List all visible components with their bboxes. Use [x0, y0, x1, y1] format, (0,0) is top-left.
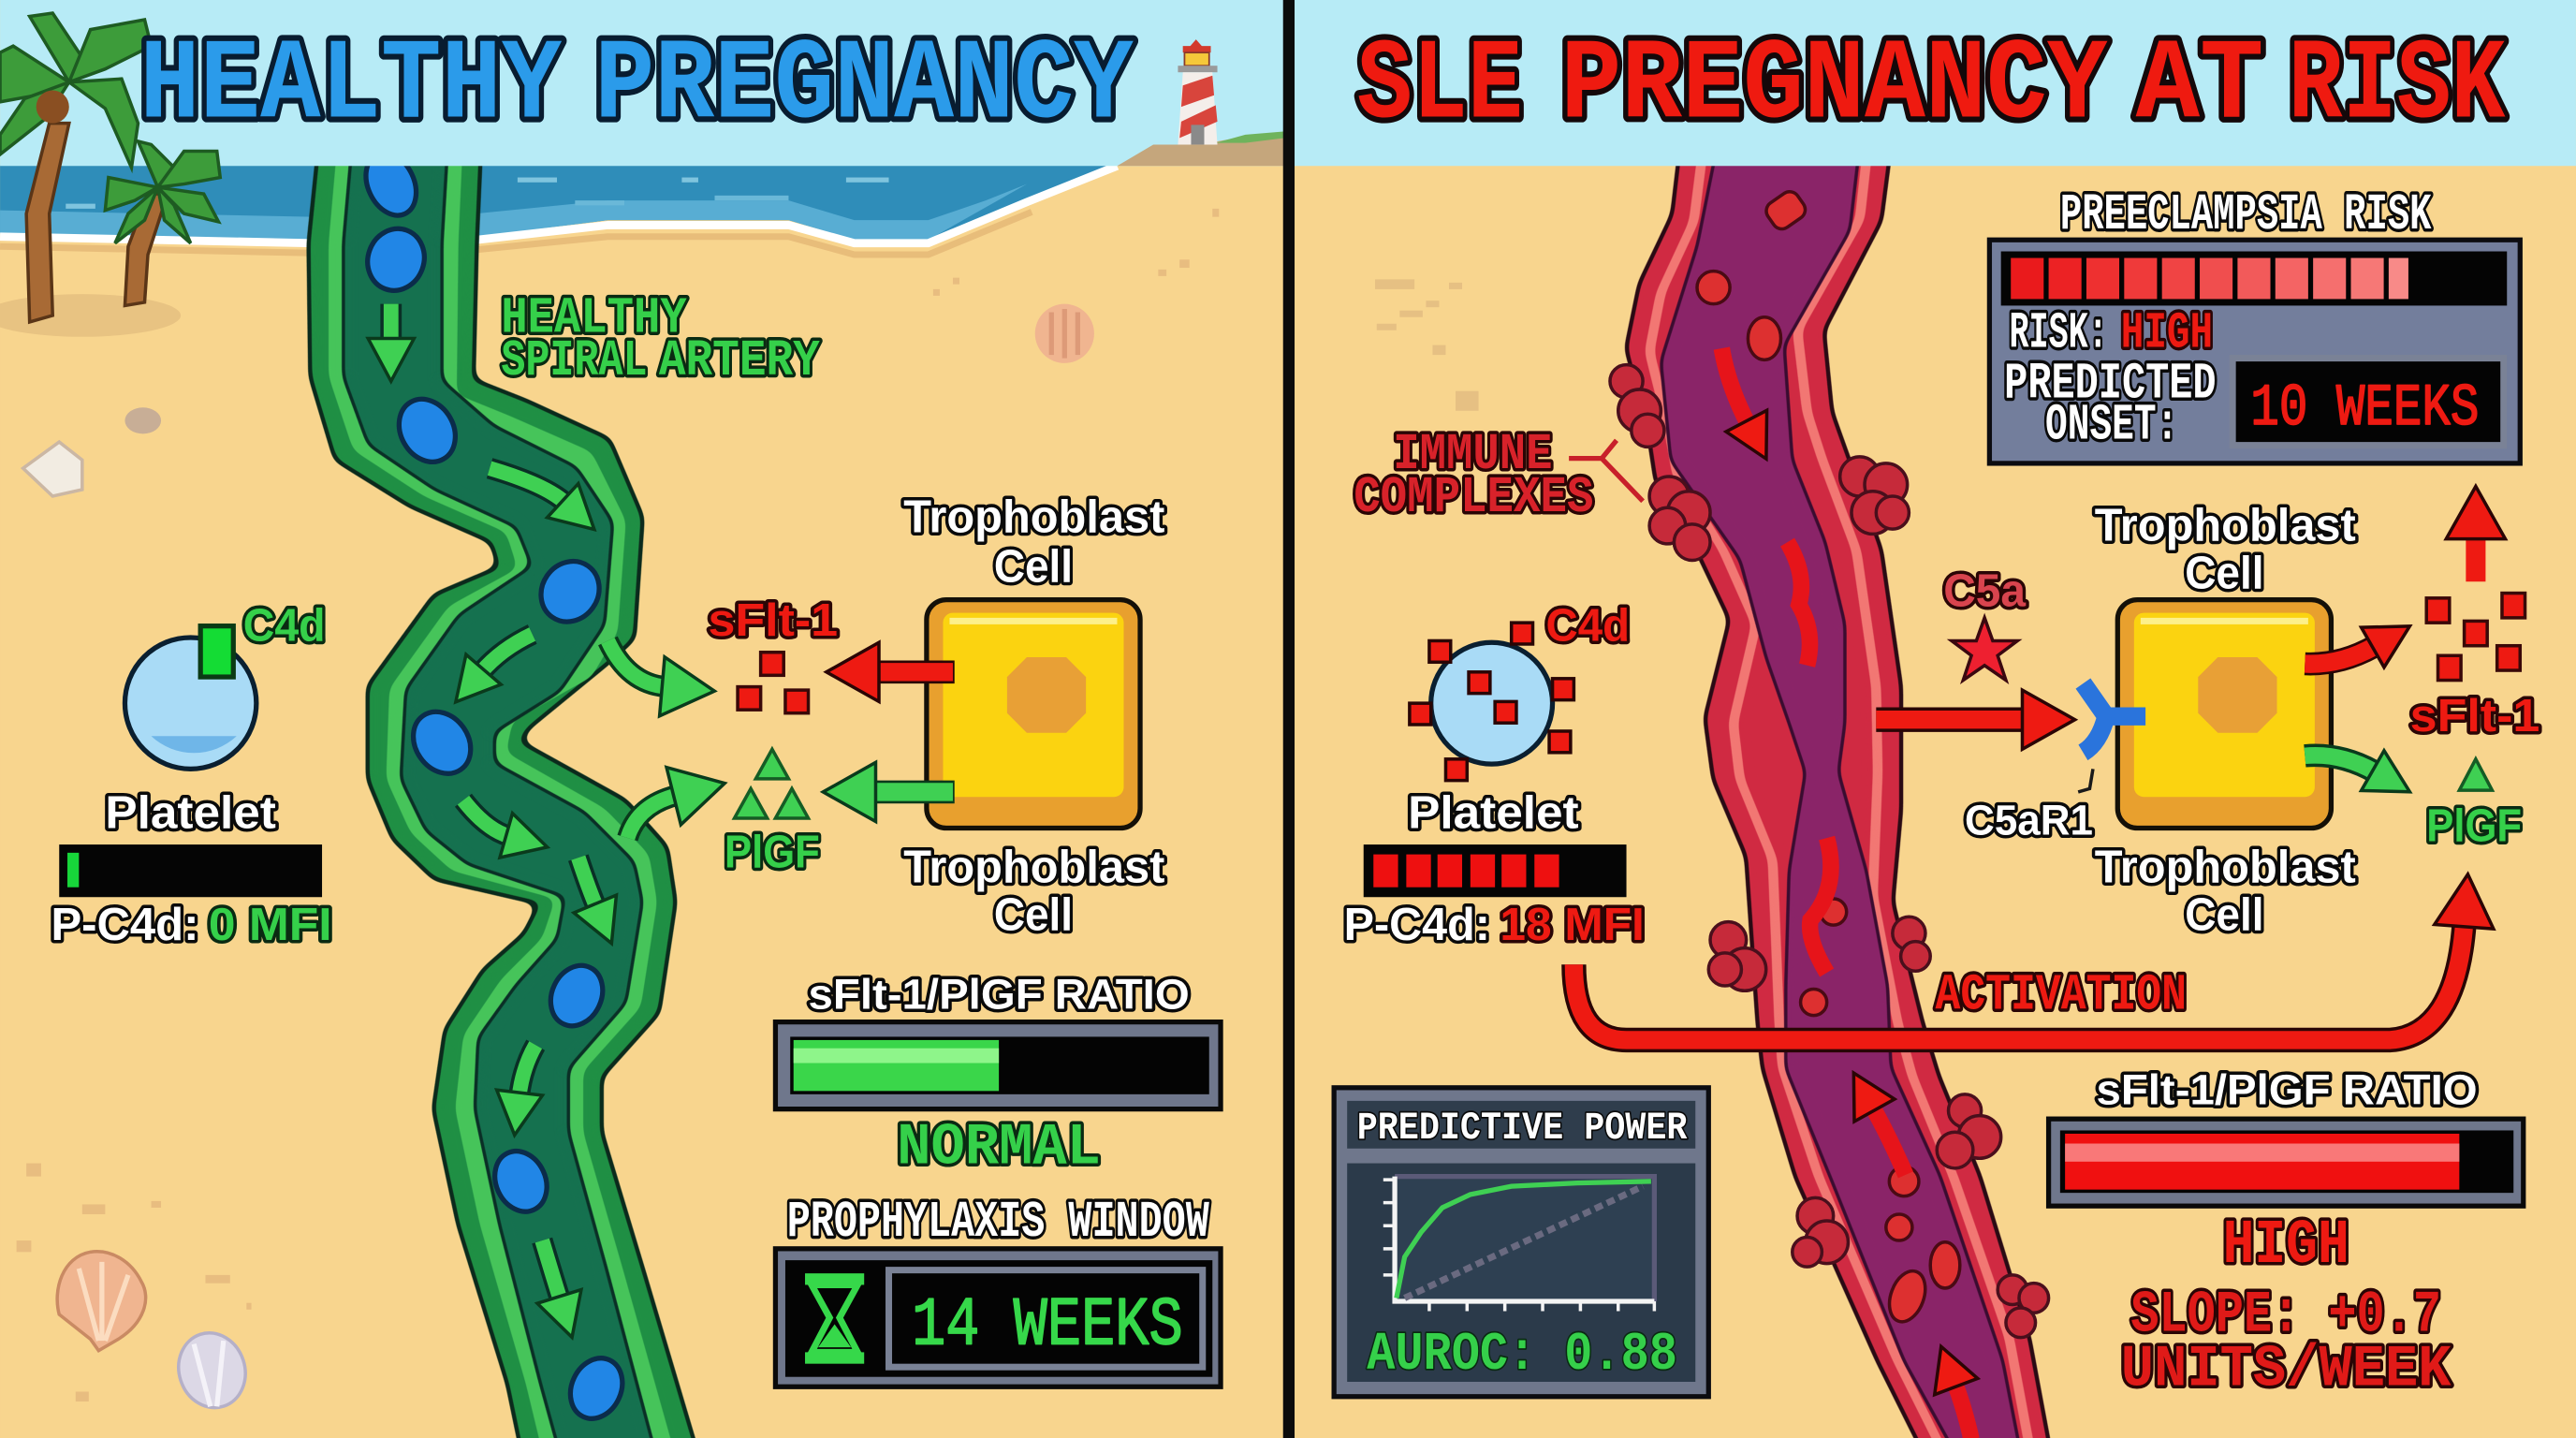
immune complex clots	[1610, 365, 2049, 1338]
label: trophoblast cell bottom healthy	[903, 842, 1164, 940]
label: C4d SLE: C4d	[1546, 600, 1630, 651]
arrow: sFlt-1 from artery to molecules	[607, 640, 666, 687]
label: platelet SLE: Platelet	[1408, 788, 1579, 839]
label: healthy spiral artery	[501, 291, 820, 390]
label: trophoblast cell top SLE: Cell	[2185, 548, 2263, 598]
label: C5aR1: C5aR1	[1965, 797, 2093, 844]
label: P-C4d value healthy: P-C4d:	[51, 900, 198, 950]
title: healthy pregnancy: PREGNANCY	[594, 22, 1134, 152]
icon: lighthouse	[1178, 39, 1218, 144]
arrow: trophoblast to PlGF	[872, 785, 955, 799]
bar: P-C4d SLE	[1364, 844, 1627, 897]
label: trophoblast cell bottom healthy: Trophoblast	[903, 842, 1164, 892]
icon: pebble	[124, 407, 161, 433]
label: trophoblast cell bottom healthy: Cell	[994, 889, 1073, 940]
panel: sFlt-1/PlGF ratio SLE: sFlt-1/PlGF RATIO	[2096, 1065, 2478, 1113]
icon: C5a star	[1952, 618, 2017, 681]
label: PlGF SLE: PlGF	[2426, 801, 2522, 852]
label: C4d healthy: C4d	[243, 600, 326, 651]
label: trophoblast cell top SLE: Trophoblast	[2095, 500, 2356, 550]
chart: SLE diseased spiral artery	[1610, 131, 2054, 1438]
arrow: trophoblast to sFlt-1	[875, 666, 955, 679]
label: trophoblast cell top healthy: Cell	[994, 541, 1073, 592]
panel: preeclampsia risk: RISK:	[2009, 305, 2108, 362]
panel: preeclampsia risk: HIGH	[2121, 305, 2213, 362]
panel: preeclampsia risk: PREECLAMPSIA RISK	[2060, 187, 2432, 244]
icon: peach seashell near horizon	[1035, 304, 1094, 363]
title: SLE pregnancy at risk	[1357, 22, 2506, 152]
panel: predictive power: PREDICTIVE POWER	[1357, 1106, 1688, 1151]
arrow: PlGF from artery to molecules	[627, 795, 677, 838]
panel: prophylaxis window	[775, 1195, 1221, 1387]
label: sFlt-1 healthy: sFlt-1	[708, 595, 838, 646]
icon: PlGF molecules	[735, 749, 809, 818]
bar: P-C4d healthy	[59, 844, 322, 897]
label: trophoblast cell bottom SLE: Cell	[2185, 889, 2263, 940]
panel: sFlt-1/PlGF ratio healthy	[775, 971, 1221, 1181]
label: P-C4d value SLE: P-C4d:	[1344, 900, 1490, 950]
label: P-C4d value healthy	[51, 900, 332, 950]
panel: preeclampsia risk: PREDICTED	[2004, 357, 2217, 414]
arrow: cell to sFlt-1	[2305, 646, 2376, 664]
panel: healthy pregnancy beach background	[0, 0, 1284, 1438]
icon: trophoblast cell SLE	[2117, 600, 2331, 829]
label: C5a: C5a	[1943, 566, 2027, 617]
label: P-C4d value healthy: 0 MFI	[209, 900, 332, 950]
label: activation: ACTIVATION	[1935, 968, 2187, 1025]
label: healthy spiral artery: HEALTHY	[501, 291, 687, 348]
panel: sFlt-1/PlGF ratio SLE: SLOPE: +0.7	[2130, 1282, 2441, 1349]
icon: peach scallop shell	[57, 1252, 146, 1351]
title: SLE pregnancy at risk: AT	[2136, 22, 2263, 152]
title: SLE pregnancy at risk: PREGNANCY	[1560, 22, 2108, 152]
panel: sFlt-1/PlGF ratio SLE: HIGH	[2223, 1211, 2349, 1282]
label: C5aR1	[1965, 769, 2093, 844]
panel: sFlt-1/PlGF ratio healthy: sFlt-1/PlGF RATIO	[809, 971, 1190, 1019]
icon: platelet healthy	[124, 626, 256, 769]
icon: trophoblast cell healthy	[927, 600, 1140, 829]
label: P-C4d value SLE: 18 MFI	[1500, 900, 1645, 950]
icon: sFlt-1 molecules	[738, 653, 809, 713]
label: trophoblast cell bottom SLE: Trophoblast	[2095, 842, 2356, 892]
icon: large palm tree	[0, 13, 181, 337]
chart: healthy spiral artery	[311, 131, 703, 1438]
icon: sFlt-1 molecules SLE	[2426, 594, 2525, 681]
label: trophoblast cell top healthy: Trophoblast	[903, 492, 1164, 543]
panel: predictive power	[1334, 1088, 1708, 1397]
arrow: C5a to receptor	[1876, 712, 2026, 726]
label: trophoblast cell top SLE	[2095, 500, 2356, 598]
icon: PlGF molecule SLE	[2459, 759, 2492, 790]
panel: preeclampsia risk: 10 WEEKS	[2250, 374, 2479, 442]
label: PlGF healthy: PlGF	[724, 828, 820, 878]
damaged red blood cells	[1697, 188, 1960, 1327]
label: healthy spiral artery: SPIRAL	[501, 333, 648, 390]
label: sFlt-1 SLE: sFlt-1	[2410, 691, 2539, 741]
label: immune complexes: COMPLEXES	[1354, 470, 1593, 527]
title: SLE pregnancy at risk: SLE	[1357, 22, 1523, 152]
flow arrows	[1721, 348, 1971, 1438]
label: immune complexes: IMMUNE	[1393, 427, 1553, 484]
title: SLE pregnancy at risk: RISK	[2289, 22, 2506, 152]
icon: lavender shell	[169, 1324, 255, 1416]
icon: platelet SLE	[1410, 623, 1573, 781]
arrow: risk up	[2470, 536, 2481, 581]
divider	[1283, 0, 1295, 1438]
flow arrows	[391, 304, 596, 1299]
red blood cells	[357, 144, 632, 1427]
arrow: cell to PlGF	[2305, 756, 2376, 772]
icon: C5aR1 receptor	[2083, 683, 2145, 753]
panel: sFlt-1/PlGF ratio healthy: NORMAL	[897, 1114, 1101, 1181]
icon: hourglass	[805, 1273, 864, 1364]
risk meter segments	[2011, 258, 2408, 299]
label: healthy spiral artery: ARTERY	[659, 333, 820, 390]
label: P-C4d value SLE	[1344, 900, 1645, 950]
chart: ROC curve	[1383, 1177, 1654, 1312]
panel: prophylaxis window: PROPHYLAXIS WINDOW	[787, 1195, 1209, 1252]
sky strips	[0, 0, 2576, 166]
arrow: activation pathway	[1573, 923, 2465, 1040]
title: healthy pregnancy	[139, 22, 1134, 152]
icon: small palm tree	[105, 141, 220, 305]
panel: sFlt-1/PlGF ratio SLE	[2049, 1065, 2524, 1402]
panel: SLE pregnancy beach background	[1292, 0, 2576, 1438]
label: trophoblast cell bottom SLE	[2095, 842, 2356, 940]
panel: predictive power: AUROC: 0.88	[1367, 1325, 1677, 1386]
label: trophoblast cell top healthy	[903, 492, 1164, 592]
panel: preeclampsia risk: ONSET:	[2045, 398, 2178, 455]
panel: prophylaxis window: 14 WEEKS	[912, 1288, 1183, 1366]
panel: preeclampsia risk	[1989, 187, 2520, 463]
panel: sFlt-1/PlGF ratio SLE: UNITS/WEEK	[2121, 1335, 2452, 1402]
title: healthy pregnancy: HEALTHY	[139, 22, 563, 152]
icon: white seashell	[23, 442, 82, 496]
label: immune complexes	[1354, 427, 1643, 527]
label: platelet healthy: Platelet	[105, 788, 276, 839]
